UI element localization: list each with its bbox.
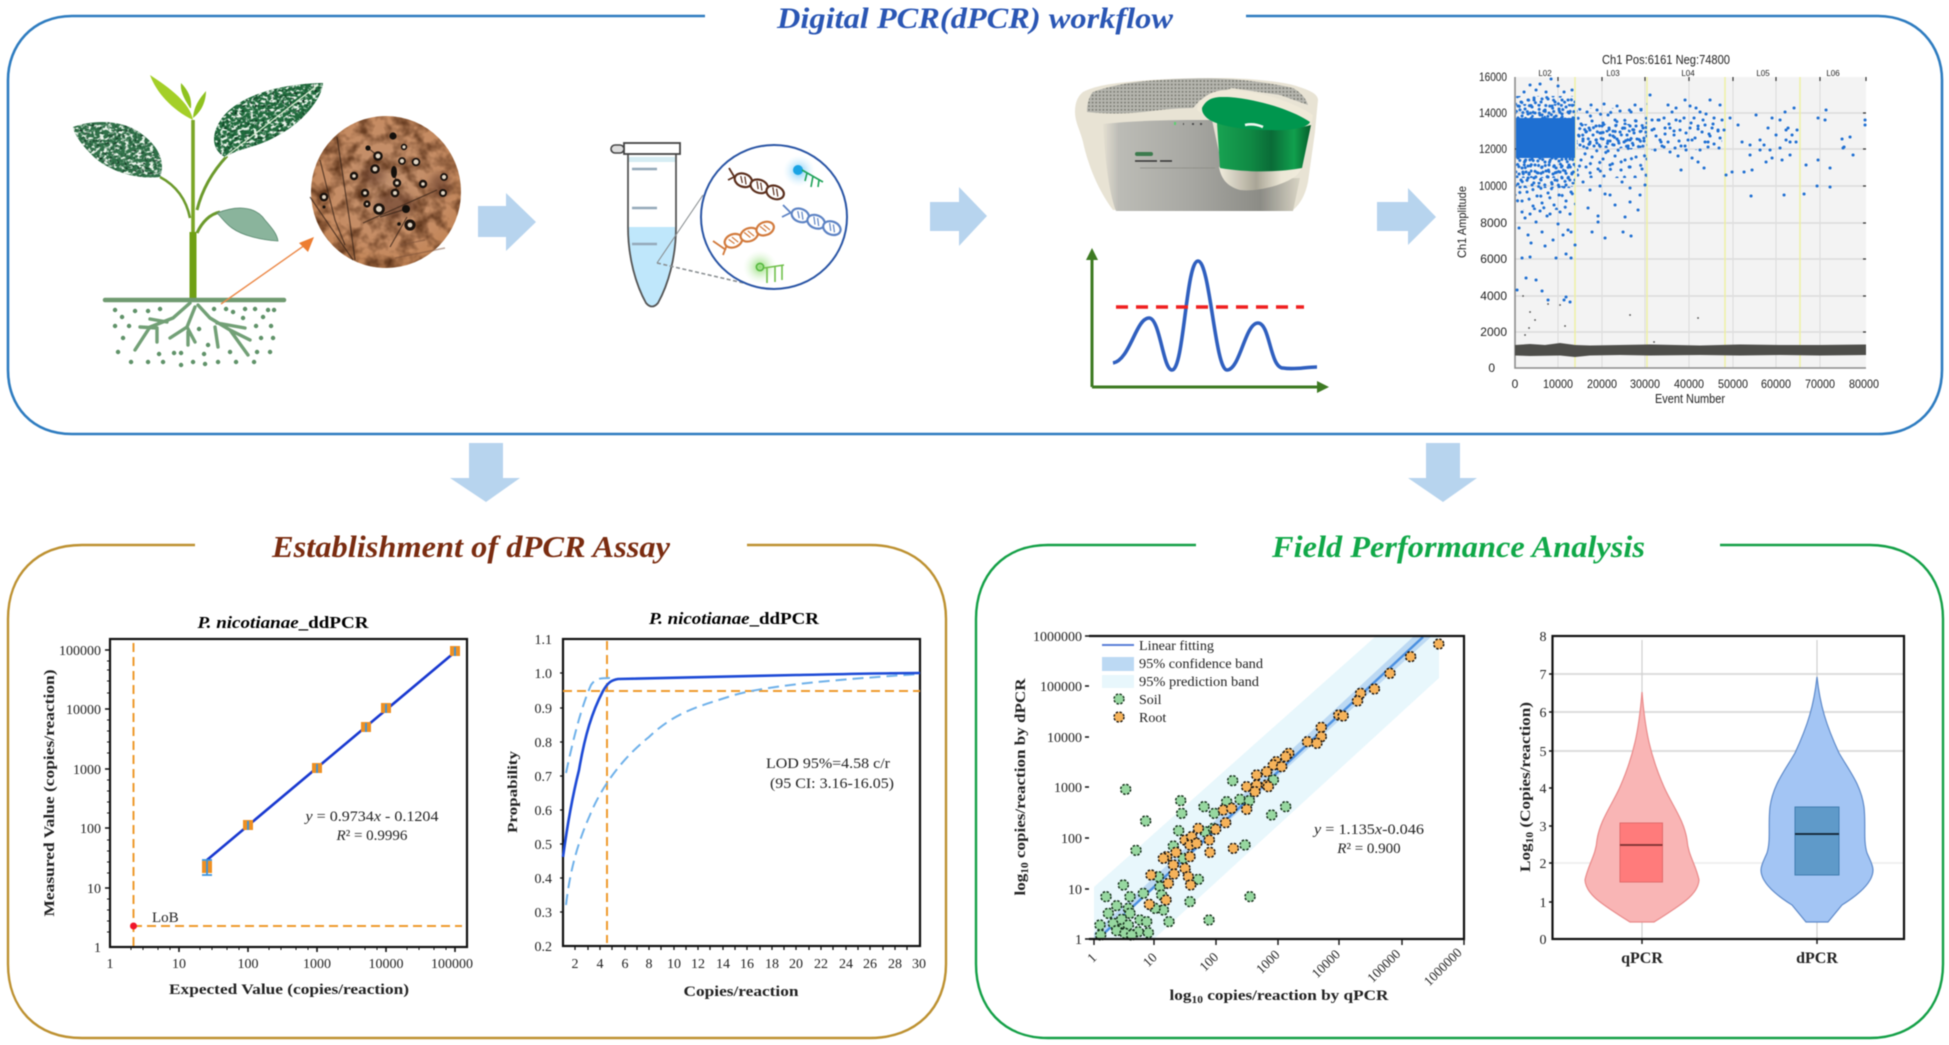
chart: probit LOD curve: 18	[765, 957, 779, 972]
LOD guides	[563, 641, 920, 943]
chart: standard curve: 1	[94, 941, 101, 956]
chart: dPCR vs qPCR correlation: 10	[1068, 883, 1082, 898]
chart: violin plots qPCR vs dPCR: qPCR	[1621, 950, 1663, 967]
chart: standard curve: 10	[172, 957, 186, 972]
chart: droplet amplitude scatter: 50000	[1718, 377, 1748, 391]
chart labels: 8000	[1480, 216, 1507, 230]
arrow: root to micrograph	[221, 237, 314, 304]
chart: dPCR vs qPCR correlation: 10	[1140, 950, 1160, 970]
heading: Establishment of dPCR Assay: Establishment of dPCR Assay	[271, 529, 670, 564]
chart: dPCR vs qPCR correlation: y = 1.135 x-0.046	[1312, 822, 1425, 838]
chart: probit LOD curve: 0.8	[534, 736, 552, 751]
chart labels	[1479, 70, 1507, 375]
arrow: step 3	[1377, 188, 1436, 245]
chart: dPCR vs qPCR correlation: 1000	[1253, 947, 1283, 977]
chart: probit LOD curve: 22	[814, 957, 828, 972]
chart: probit LOD curve: 28	[888, 957, 902, 972]
chart: droplet amplitude scatter: 0	[1512, 377, 1519, 391]
chart: standard curve: 10	[87, 882, 101, 897]
chart: droplet amplitude scatter: Event Number	[1655, 391, 1726, 406]
chart: dPCR vs qPCR correlation: 100	[1061, 832, 1082, 847]
image: pathogen micrograph	[310, 116, 461, 268]
chart: standard curve: R² = 0.9996	[336, 828, 408, 844]
field frame	[976, 545, 1943, 1038]
chart: violin plots qPCR vs dPCR: 1	[1540, 896, 1546, 911]
dashed LoB guides	[133, 643, 462, 947]
linear fit	[1098, 637, 1423, 939]
chart: dPCR vs qPCR correlation: 1000	[1054, 781, 1082, 796]
chart: dPCR vs qPCR correlation: 10	[1020, 862, 1031, 874]
icon: plant with roots	[73, 75, 323, 365]
chart: droplet amplitude scatter: L02	[1538, 69, 1552, 78]
chart: standard curve: 10000	[368, 957, 404, 972]
chart: dPCR vs qPCR correlation: 1000000	[1421, 945, 1465, 989]
chart: probit LOD curve: Copies/reaction	[684, 984, 799, 1000]
chart: droplet amplitude scatter: Ch1 Amplitude	[1455, 186, 1469, 258]
violin: dPCR	[1761, 677, 1873, 922]
prediction band	[1094, 636, 1439, 939]
chart: violin plots qPCR vs dPCR: 8	[1540, 630, 1546, 645]
fitted probit curve	[563, 673, 920, 857]
chart: standard curve: 100	[238, 957, 258, 972]
dna: orange	[713, 219, 776, 255]
chart: probit LOD curve: 12	[691, 957, 705, 972]
chart: probit LOD curve: 4	[596, 957, 604, 972]
chart labels: 0	[1488, 361, 1495, 375]
legend: Root	[1139, 711, 1166, 726]
axes	[1089, 636, 1464, 939]
chart labels: 14000	[1479, 106, 1507, 120]
chart: standard curve: 10000	[66, 703, 101, 718]
chart: dPCR vs qPCR correlation: 10	[1191, 995, 1203, 1006]
chart: standard curve	[42, 613, 473, 998]
chart: probit LOD curve: LOD 95%=4.58 c/r	[766, 756, 890, 772]
chart: probit LOD curve: 20	[789, 957, 803, 972]
chart: dPCR vs qPCR correlation: log	[1170, 988, 1189, 1004]
legend: 95% confidence band	[1139, 657, 1263, 672]
chart: probit LOD curve: 24	[839, 957, 853, 972]
panel: Field Performance Analysis	[976, 529, 1943, 1038]
chart: probit LOD curve: 0.5	[534, 838, 552, 853]
chart: droplet amplitude scatter: 80000	[1849, 377, 1879, 391]
chart: fluorescence peaks	[1086, 248, 1329, 393]
chart: dPCR vs qPCR correlation: 1000000	[1033, 630, 1082, 645]
chart: standard curve: 1000	[73, 763, 101, 778]
legend: 95% prediction band	[1139, 675, 1259, 690]
chart labels: 4000	[1480, 289, 1507, 303]
callout lines: tube magnification	[657, 195, 748, 284]
confidence bounds	[566, 674, 920, 905]
chart: droplet amplitude scatter: L05	[1756, 69, 1770, 78]
probe: green	[743, 250, 784, 284]
confidence band	[1094, 636, 1432, 939]
dna: blue	[782, 205, 843, 238]
chart: violin plots qPCR vs dPCR: 0	[1540, 933, 1546, 948]
panel: Digital PCR workflow	[8, 2, 1942, 434]
ground line	[105, 298, 284, 302]
panel: Establishment of dPCR Assay	[8, 529, 946, 1038]
chart: probit LOD curve: 10	[667, 957, 681, 972]
chart: probit LOD curve: 0.4	[534, 872, 552, 887]
chart: droplet amplitude scatter: L03	[1606, 69, 1620, 78]
chart: standard curve: 100000	[59, 644, 101, 659]
chart: probit LOD curve: 14	[716, 957, 730, 972]
chart: dPCR vs qPCR correlation: 10000	[1309, 946, 1343, 981]
chart: standard curve: LoB	[152, 910, 179, 926]
violin: qPCR	[1585, 692, 1699, 922]
chart: standard curve: 1000	[303, 957, 331, 972]
arrow: step 1	[478, 193, 536, 251]
chart: standard curve: Measured Value (copies/reaction)	[42, 669, 58, 916]
chart: probit LOD curve: 8	[646, 957, 652, 972]
chart: droplet amplitude scatter: 40000	[1674, 377, 1704, 391]
chart: probit LOD curve: (95 CI: 3.16-16.05)	[770, 776, 894, 792]
chart: probit LOD curve: 26	[863, 957, 877, 972]
chart: dPCR vs qPCR correlation: R² = 0.900	[1336, 841, 1401, 857]
roots	[135, 303, 250, 355]
chart: violin plots qPCR vs dPCR: 2	[1540, 857, 1546, 872]
heading: Digital PCR workflow: Digital PCR(dPCR) workflow	[776, 2, 1174, 35]
chart: dPCR vs qPCR correlation: 100000	[1364, 946, 1404, 985]
chart labels: 10000	[1479, 179, 1507, 193]
chart: probit LOD curve: 0.7	[534, 770, 552, 785]
chart: violin plots qPCR vs dPCR: 5	[1540, 745, 1546, 760]
chart labels: 6000	[1480, 252, 1507, 266]
chart: violin plots qPCR vs dPCR: 3	[1540, 820, 1546, 835]
chart: violin plots qPCR vs dPCR: Log	[1518, 847, 1534, 872]
chart: violin plots qPCR vs dPCR: 4	[1540, 782, 1546, 797]
chart: violin plots qPCR vs dPCR	[1518, 630, 1904, 967]
chart: standard curve: 1	[106, 957, 114, 972]
stray dots	[1523, 296, 1698, 342]
chart: probit LOD curve: 30	[912, 957, 926, 972]
chart: dPCR vs qPCR correlation	[1013, 630, 1465, 1006]
chart: violin plots qPCR vs dPCR: (Copies/reaction)	[1518, 702, 1534, 832]
chart: droplet amplitude scatter	[1455, 52, 1879, 406]
probe: blue	[783, 155, 823, 187]
chart: standard curve: 100	[80, 822, 101, 837]
workflow frame	[8, 16, 1942, 434]
chart: probit LOD curve: 2	[572, 957, 578, 972]
chart: dPCR vs qPCR correlation: log	[1013, 876, 1029, 896]
chart: probit LOD curve: 0.2	[534, 940, 552, 955]
chart: probit LOD curve: 0.9	[534, 702, 552, 717]
chart: droplet amplitude scatter: 60000	[1761, 377, 1791, 391]
root points upper	[1271, 639, 1444, 767]
chart: standard curve: y = 0.9734 x - 0.1204	[303, 809, 439, 825]
chart: probit LOD curve: 1.1	[534, 633, 552, 648]
chart: standard curve: 100000	[431, 957, 473, 972]
chart: standard curve: P. nicotianae _ddPCR	[196, 613, 369, 632]
assay frame	[8, 545, 946, 1038]
chart: violin plots qPCR vs dPCR: 10	[1525, 832, 1536, 843]
leaf: small	[217, 208, 278, 241]
chart: probit LOD curve: Propability	[506, 751, 521, 833]
chart: probit LOD curve: 1.0	[534, 667, 552, 682]
chart: dPCR vs qPCR correlation: 1	[1075, 933, 1082, 948]
positive droplets	[1516, 79, 1865, 302]
chart: probit LOD curve: 0.6	[534, 804, 552, 819]
leaf: left	[73, 122, 162, 178]
legend	[1102, 639, 1263, 726]
arrow: down left	[450, 443, 520, 502]
chart: probit LOD curve: 6	[622, 957, 628, 972]
negative droplets band	[1515, 343, 1866, 357]
chart: dPCR vs qPCR correlation: 100000	[1040, 680, 1082, 695]
chart: dPCR vs qPCR correlation: 10000	[1047, 731, 1082, 746]
chart: standard curve: Expected Value (copies/reaction)	[169, 982, 409, 998]
soil dots	[115, 309, 274, 365]
chart: droplet amplitude scatter: Ch1 Pos:6161 Neg:74800	[1602, 52, 1730, 67]
chart: droplet amplitude scatter: 20000	[1587, 377, 1617, 391]
leaf: right	[214, 83, 323, 157]
callout: DNA and probes circle	[701, 145, 847, 289]
chart: probit LOD curve: P. nicotianae _ddPCR	[648, 609, 820, 628]
chart: dPCR vs qPCR correlation: copies/reaction by qPCR	[1203, 988, 1389, 1004]
chart: dPCR vs qPCR correlation: copies/reaction by dPCR	[1013, 678, 1029, 862]
arrow: down right	[1408, 443, 1477, 502]
chart: droplet amplitude scatter: L04	[1681, 69, 1695, 78]
arrow: step 2	[930, 187, 987, 246]
dna: brown	[728, 168, 786, 202]
chart: probit LOD curve: 16	[740, 957, 754, 972]
chart: droplet amplitude scatter: L06	[1826, 69, 1840, 78]
chart: droplet amplitude scatter: 30000	[1630, 377, 1660, 391]
legend: Soil	[1139, 693, 1162, 708]
icon: droplet reader instrument	[1075, 78, 1318, 211]
root points lower	[1144, 760, 1287, 909]
chart labels: 2000	[1480, 325, 1507, 339]
chart: dPCR vs qPCR correlation: 1	[1084, 950, 1100, 966]
legend: Linear fitting	[1139, 639, 1214, 654]
fit line and points	[207, 652, 455, 860]
chart: probit LOD curve: 0.3	[534, 906, 552, 921]
chart: dPCR vs qPCR correlation: 100	[1196, 949, 1221, 974]
icon: reaction tube	[611, 143, 680, 306]
chart: violin plots qPCR vs dPCR: 7	[1540, 668, 1546, 683]
chart labels: 12000	[1479, 142, 1507, 156]
chart labels: 16000	[1479, 70, 1507, 84]
chart: droplet amplitude scatter: 10000	[1543, 377, 1573, 391]
chart: probit LOD curve	[506, 609, 926, 1000]
chart: violin plots qPCR vs dPCR: 6	[1540, 706, 1546, 721]
chart: violin plots qPCR vs dPCR: dPCR	[1796, 950, 1838, 967]
leaf: bud	[150, 75, 206, 120]
heading: Field Performance Analysis: Field Performance Analysis	[1271, 529, 1645, 564]
soil points	[1095, 775, 1291, 940]
chart: droplet amplitude scatter: 70000	[1805, 377, 1835, 391]
